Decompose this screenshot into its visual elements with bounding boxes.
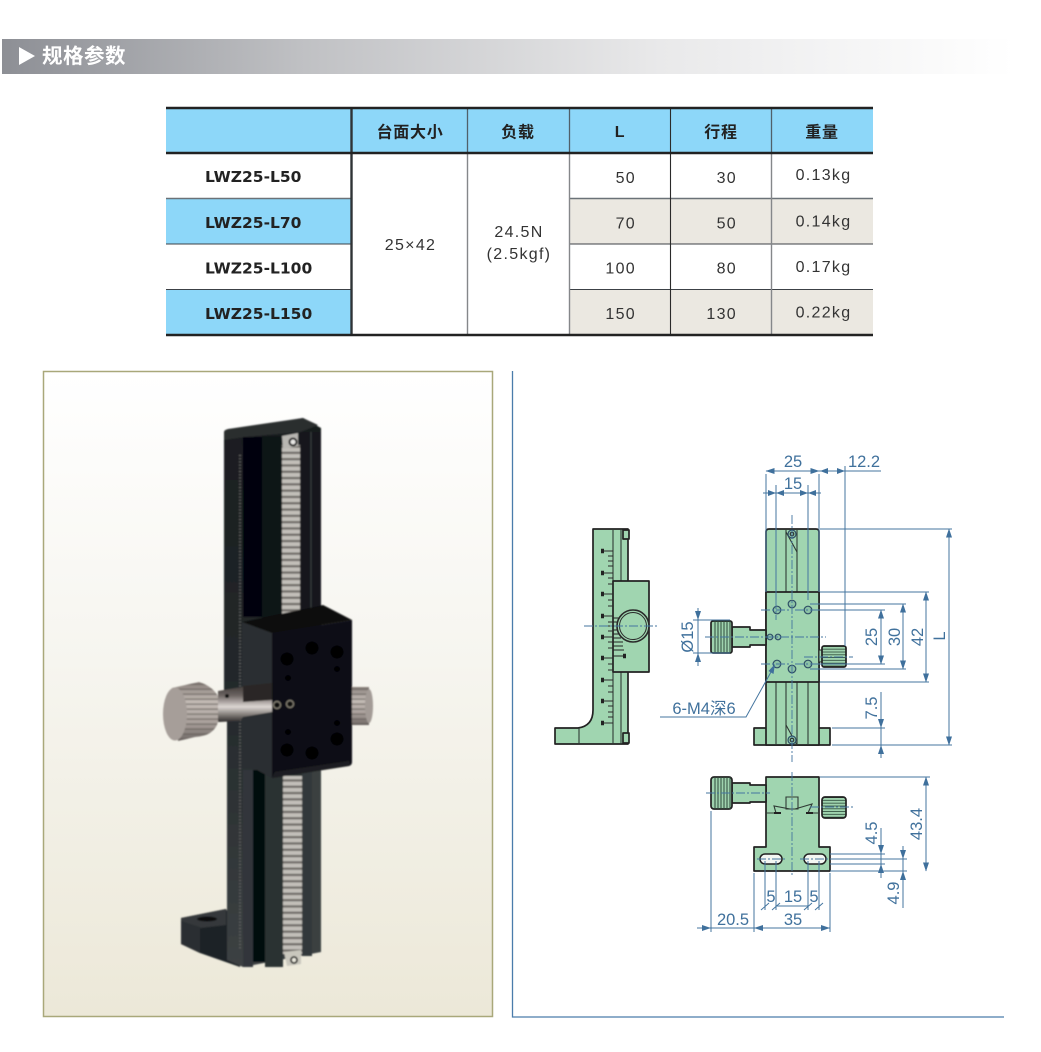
dimensions: end view: 4.9 (885, 882, 903, 904)
scale dots (601, 551, 626, 723)
table header row: L (615, 124, 625, 141)
dimensions: end view: 20.5 (717, 911, 749, 929)
merged cells: table size and load: 25×42 (385, 237, 436, 254)
model names: LWZ25-L150 (205, 305, 312, 323)
travel values: 50 (717, 216, 737, 232)
gear rack: upper and lower (282, 433, 302, 966)
dimensions: front view: 42 (909, 628, 927, 646)
left knob and shaft (163, 682, 272, 741)
weight values: 0.22kg (796, 304, 851, 322)
dimensions: end view: 5 (766, 888, 776, 906)
L values: 70 (616, 216, 636, 232)
dimensions: end view: 35 (784, 911, 802, 929)
model names: LWZ25-L70 (205, 214, 302, 232)
model names: LWZ25-L50 (205, 168, 302, 186)
panel: dimension drawing frame (512, 371, 1004, 1017)
L values: 150 (605, 306, 636, 323)
mounting slots (760, 854, 826, 864)
table header row: 重量 (805, 124, 839, 142)
dimensions: end view (697, 777, 930, 932)
dimensions: knob diameter and thread callout: 6-M4深6 (672, 699, 736, 718)
knobs (711, 777, 846, 818)
table header row (377, 122, 839, 142)
dimensions: front view (763, 453, 952, 758)
dimensions: end view: 4.5 (863, 822, 881, 844)
dimensions: front view: 15 (784, 475, 802, 493)
scale marks (603, 551, 613, 723)
rail body (224, 418, 321, 967)
L values: 100 (605, 260, 636, 278)
L values: 50 (616, 170, 636, 187)
carriage block (242, 605, 352, 778)
dimensions: end view: 15 (784, 888, 802, 906)
table header row: 负载 (501, 122, 535, 142)
left knob (711, 621, 766, 653)
L values (605, 170, 636, 323)
right knob (819, 646, 846, 667)
weight values: 0.17kg (796, 259, 851, 276)
table header row: 台面大小 (377, 122, 443, 142)
panel: product photo (44, 372, 492, 1016)
model names (205, 168, 312, 323)
drawing: side view (555, 529, 657, 744)
rail scale marks (239, 455, 241, 950)
merged cells: table size and load (385, 224, 551, 263)
dimensions: front view: L (931, 631, 949, 641)
product: linear stage (163, 418, 373, 967)
model names: LWZ25-L100 (205, 260, 312, 278)
weight values (796, 167, 851, 322)
dimensions: end view: 43.4 (908, 808, 926, 840)
weight values: 0.14kg (796, 214, 851, 230)
section heading: 规格参数: 规格参数 (42, 44, 126, 68)
weight values: 0.13kg (796, 167, 851, 184)
right knob (350, 687, 373, 725)
dimensions: front view: 25 (784, 453, 802, 471)
handwheel circle (613, 610, 649, 656)
drawing: front view (705, 515, 853, 762)
travel values: 80 (717, 260, 737, 278)
table header row: 行程 (704, 124, 738, 142)
section heading: 规格参数 (2, 39, 1014, 74)
dimensions: front view: 30 (886, 628, 904, 646)
dimensions: front view: 12.2 (848, 453, 880, 471)
dimensions: end view: 5 (809, 888, 819, 906)
dimensions: knob diameter and thread callout: Ø15 (679, 621, 697, 653)
mounting holes (767, 530, 812, 744)
drawing: end view (706, 772, 853, 875)
merged cells: table size and load: 24.5N (494, 224, 544, 241)
dimensions: knob diameter and thread callout (660, 608, 775, 718)
merged cells: table size and load: (2.5kgf) (487, 246, 551, 263)
travel values: 30 (717, 170, 737, 187)
foot bracket (181, 909, 240, 967)
dimensions: front view: 25 (863, 628, 881, 646)
specification table (166, 108, 873, 335)
dimensions: front view: 7.5 (863, 697, 881, 719)
travel values: 130 (706, 306, 737, 323)
travel values (706, 170, 737, 323)
